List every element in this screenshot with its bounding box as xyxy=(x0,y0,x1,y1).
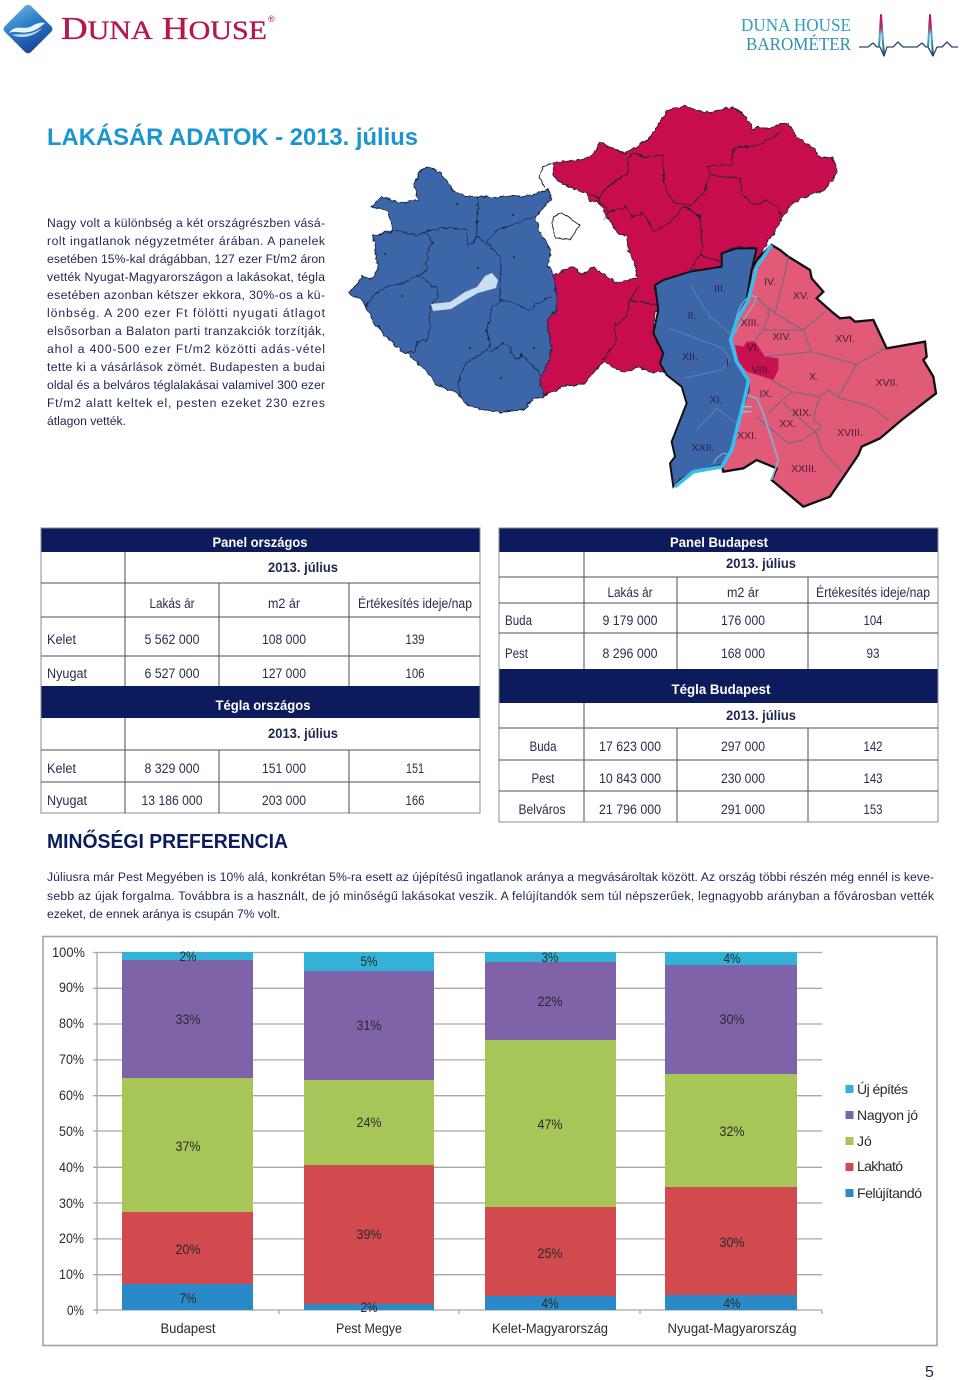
brick rows: Pest xyxy=(532,771,555,786)
text block: intro paragraph: vették Nyugat-Magyarországon a lakásokat, tégla xyxy=(47,270,325,284)
district labels: IX. xyxy=(760,388,772,400)
panel column heads xyxy=(608,585,930,600)
district labels: XVI. xyxy=(835,333,855,345)
district labels: XXII. xyxy=(692,442,714,454)
value labels: 5% xyxy=(360,953,378,969)
text block: intro paragraph: ahol a 400-500 ezer Ft/m2 közötti adás-vétel xyxy=(47,342,325,356)
value labels: 22% xyxy=(538,993,562,1009)
text block: intro paragraph: átlagon vették. xyxy=(47,414,126,428)
brick rows: Buda xyxy=(530,739,557,754)
text block: intro paragraph: rolt ingatlanok négyzetméter árában. A panelek xyxy=(47,234,326,248)
panel column heads: Lakás ár xyxy=(150,596,195,611)
bar: Kelet-Magyarország xyxy=(485,952,616,1310)
value labels: 4% xyxy=(542,1295,558,1311)
district labels: XXIII. xyxy=(791,463,817,475)
value labels: 2% xyxy=(360,1299,378,1315)
brick rows xyxy=(518,739,882,817)
legend xyxy=(846,1081,922,1201)
value labels: 47% xyxy=(538,1116,562,1132)
table header bars xyxy=(41,528,480,718)
value labels: 4% xyxy=(724,1295,740,1311)
brick rows: 10 843 000 xyxy=(599,771,661,786)
text block: intro paragraph: esetében azonban kétszer ekkora, 30%-os a kü- xyxy=(47,288,325,302)
value labels: 25% xyxy=(538,1245,562,1261)
Pest county outline xyxy=(539,163,580,240)
panel rows: 5 562 000 xyxy=(144,632,200,647)
panel rows: 176 000 xyxy=(721,613,765,628)
brick rows: 291 000 xyxy=(721,802,765,817)
value labels: 37% xyxy=(176,1138,200,1154)
district labels: X. xyxy=(809,371,819,383)
panel rows: Kelet xyxy=(47,632,76,647)
district labels: XVIII. xyxy=(837,427,863,439)
value labels: 20% xyxy=(176,1241,200,1257)
barometer heading xyxy=(741,15,958,56)
y axis labels: 90% xyxy=(59,979,84,995)
legend: Nagyon jó xyxy=(857,1107,918,1123)
legend: Új építés xyxy=(857,1081,908,1097)
table: Panel Budapest and Tégla Budapest xyxy=(499,528,938,822)
district labels: III. xyxy=(714,283,726,295)
table: Panel országos and Tégla országos xyxy=(41,528,480,813)
text block: quality paragraph: Júliusra már Pest Megyében is 10% alá, konkrétan 5%-ra esett az újépítésű ingatlanok aránya a megvásároltak között. Az ország többi részén még ennél is keve- xyxy=(47,870,934,884)
brick rows: 13 186 000 xyxy=(142,793,202,808)
value labels: 24% xyxy=(356,1114,382,1130)
map region: east Hungary (crimson) xyxy=(538,106,837,395)
brick rows: 230 000 xyxy=(721,771,765,786)
panel heading: Panel országos xyxy=(212,535,308,550)
value labels: 32% xyxy=(720,1123,744,1139)
panel column heads: m2 ár xyxy=(268,596,300,611)
gridlines and axes xyxy=(93,952,822,1314)
text block: intro paragraph: elsősorban a Balaton parti tranzakciók torzítják, xyxy=(47,324,325,338)
y axis labels: 30% xyxy=(59,1195,84,1211)
district labels: XXI. xyxy=(737,430,757,442)
bar: Budapest xyxy=(122,952,253,1310)
text block: intro paragraph: oldal és a belváros téglalakásai valamivel 300 ezer xyxy=(47,378,325,392)
district labels xyxy=(682,276,898,475)
brick rows: 151 xyxy=(406,761,424,776)
value labels: 2% xyxy=(180,948,196,964)
wordmark: DUNA HOUSE xyxy=(61,10,267,46)
district labels: VIII. xyxy=(752,364,770,376)
text block: intro paragraph: tette ki a vásárlások zömét. Budapesten a budai xyxy=(47,360,325,374)
panel rows xyxy=(505,613,883,661)
brick rows: 297 000 xyxy=(721,739,765,754)
table header bars xyxy=(499,528,938,703)
registered mark: ® xyxy=(268,14,275,24)
bar: Nyugat-Magyarország xyxy=(665,952,797,1310)
barometer title: DUNA HOUSE xyxy=(741,15,851,35)
panel period: 2013. július xyxy=(726,556,796,571)
panel rows: 93 xyxy=(866,646,880,661)
y axis labels: 10% xyxy=(59,1266,84,1282)
panel period: 2013. július xyxy=(268,560,338,575)
brick rows: 8 329 000 xyxy=(144,761,200,776)
text block: intro paragraph: Ft/m2 alatt keltek el, pesten ezeket 230 ezres xyxy=(47,396,325,410)
x axis labels xyxy=(160,1320,796,1336)
panel rows: 8 296 000 xyxy=(602,646,658,661)
district labels: IV. xyxy=(764,276,776,288)
panel rows: Buda xyxy=(505,613,532,628)
brick period: 2013. július xyxy=(726,708,796,723)
heading: quality preference: MINŐSÉGI PREFERENCIA xyxy=(47,830,288,853)
bar: Pest Megye xyxy=(304,952,434,1310)
map: Hungary and Budapest xyxy=(349,106,936,507)
brick rows: 143 xyxy=(864,771,882,786)
icon: blue diamond xyxy=(4,5,52,53)
brick rows: 153 xyxy=(864,802,882,817)
value labels: 33% xyxy=(176,1011,200,1027)
panel rows: 104 xyxy=(864,613,883,628)
icon: heartbeat line xyxy=(859,15,958,56)
district labels: XV. xyxy=(793,290,809,302)
y axis labels: 0% xyxy=(67,1302,84,1318)
value labels: 39% xyxy=(356,1226,382,1242)
value labels: 7% xyxy=(180,1290,196,1306)
legend: Lakható xyxy=(857,1158,903,1174)
panel heading: Panel Budapest xyxy=(670,535,768,550)
text block: quality paragraph: sebb az újak forgalma. Továbbra is a használt, de jó minőségű lakásokat veszik. A felújítandók sem túl népszerűek, legnagyobb arányban a fővárosban vették xyxy=(47,889,935,903)
county seat dots xyxy=(384,203,535,379)
district labels: I. xyxy=(726,357,732,369)
brick heading: Tégla országos xyxy=(216,698,310,713)
legend: Felújítandó xyxy=(857,1185,922,1201)
y axis labels: 70% xyxy=(59,1051,84,1067)
text block: intro paragraph: Nagy volt a különbség a két országrészben vásá- xyxy=(47,216,325,230)
brick rows: Kelet xyxy=(47,761,76,776)
panel rows: 127 000 xyxy=(262,666,306,681)
x axis labels: Pest Megye xyxy=(336,1320,402,1336)
panel rows: 6 527 000 xyxy=(144,666,200,681)
district labels: XII. xyxy=(682,351,698,363)
panel rows xyxy=(47,632,424,681)
stacked bar chart xyxy=(43,936,937,1346)
panel rows: 106 xyxy=(406,666,424,681)
panel column heads: Értékesítés ideje/nap xyxy=(358,596,472,611)
y axis labels: 80% xyxy=(59,1015,84,1031)
panel rows: 168 000 xyxy=(721,646,765,661)
panel rows: Nyugat xyxy=(47,666,87,681)
y axis labels: 50% xyxy=(59,1123,84,1139)
text block: quality paragraph: ezeket, de ennek aránya is csupán 7% volt. xyxy=(47,907,280,921)
chart frame xyxy=(43,936,937,1346)
y axis labels xyxy=(52,944,85,1318)
value labels: 3% xyxy=(542,949,558,965)
panel column heads: m2 ár xyxy=(727,585,759,600)
y axis labels: 60% xyxy=(59,1087,84,1103)
brick rows: Nyugat xyxy=(47,793,87,808)
x axis labels: Nyugat-Magyarország xyxy=(668,1320,796,1336)
text block: intro paragraph xyxy=(47,216,326,428)
y axis labels: 20% xyxy=(59,1230,84,1246)
brick rows: 151 000 xyxy=(262,761,306,776)
x axis labels: Budapest xyxy=(160,1320,216,1336)
x axis labels: Kelet-Magyarország xyxy=(492,1320,608,1336)
panel column heads: Lakás ár xyxy=(608,585,653,600)
district labels: XI. xyxy=(710,394,722,406)
barometer title xyxy=(741,15,851,54)
value labels: 31% xyxy=(356,1017,382,1033)
map region: west Hungary (blue) xyxy=(349,167,557,412)
value labels: 30% xyxy=(720,1234,744,1250)
district labels: XIX. xyxy=(792,407,812,419)
brick rows: 21 796 000 xyxy=(599,802,661,817)
y axis labels: 40% xyxy=(59,1159,84,1175)
district labels: XIII. xyxy=(741,317,759,329)
brick rows: 142 xyxy=(864,739,882,754)
text block: intro paragraph: esetében 15%-kal drágábban, 127 ezer Ft/m2 áron xyxy=(47,252,325,266)
panel rows: 9 179 000 xyxy=(602,613,658,628)
value labels: 4% xyxy=(724,950,740,966)
text block: intro paragraph: lönbség. A 200 ezer Ft fölötti nyugati átlagot xyxy=(47,306,326,320)
lake Balaton xyxy=(431,273,498,311)
brick rows xyxy=(47,761,424,808)
brick rows: Belváros xyxy=(518,802,566,817)
district labels: XX. xyxy=(780,418,796,430)
text block: quality paragraph xyxy=(47,870,935,921)
y axis labels: 100% xyxy=(52,944,85,960)
title: LAKÁSÁR ADATOK - 2013. július xyxy=(47,123,418,151)
brick rows: 17 623 000 xyxy=(599,739,661,754)
panel column heads xyxy=(150,596,472,611)
panel column heads: Értékesítés ideje/nap xyxy=(816,585,930,600)
district labels: XIV. xyxy=(773,331,791,343)
district labels: VI. xyxy=(747,342,759,354)
brick rows: 203 000 xyxy=(262,793,306,808)
value labels xyxy=(176,948,744,1315)
panel rows: 108 000 xyxy=(262,632,306,647)
legend: Jó xyxy=(857,1133,872,1149)
value labels: 30% xyxy=(720,1011,744,1027)
brick period: 2013. július xyxy=(268,726,338,741)
panel rows: Pest xyxy=(505,646,528,661)
map: Budapest districts xyxy=(653,245,936,507)
panel rows: 139 xyxy=(406,632,424,647)
district labels: II. xyxy=(688,310,696,322)
barometer title: BAROMÉTER xyxy=(746,33,851,54)
district labels: XVII. xyxy=(876,377,898,389)
logo: Duna House xyxy=(4,5,275,53)
brick heading: Tégla Budapest xyxy=(672,682,771,697)
brick rows: 166 xyxy=(406,793,424,808)
